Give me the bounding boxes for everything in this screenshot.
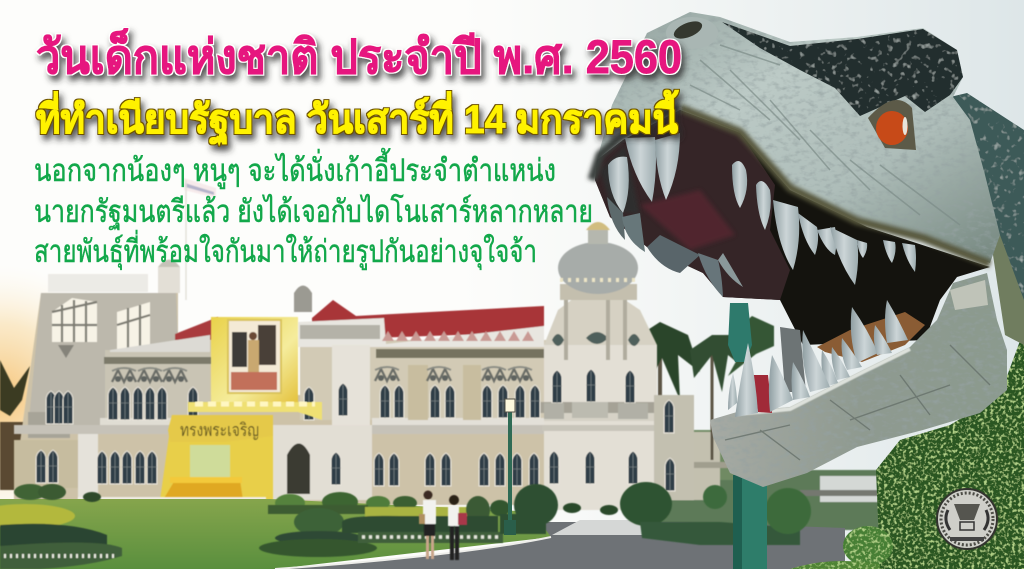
arched door (287, 444, 310, 494)
lower teeth (728, 300, 908, 417)
palms and buildings behind right side (624, 316, 885, 530)
body text: สายพันธุ์ที่พร้อมใจกันมาให้ถ่ายรูปกันอย่างจุใจจ้า (34, 230, 537, 271)
windows: upper row (46, 369, 674, 433)
trims (376, 349, 546, 358)
sign text: ทรงพระเจริญ (180, 420, 259, 440)
thai flag (184, 178, 216, 300)
right tower (540, 222, 658, 510)
body text: นายกรัฐมนตรีแล้ว ยังได้เจอกับไดโนเสาร์หลากหลาย (34, 194, 593, 230)
far right wing (654, 395, 694, 500)
government house building (14, 222, 694, 510)
left tower (14, 260, 180, 500)
tall topiary (514, 484, 558, 526)
road (275, 522, 845, 569)
people on lawn (419, 490, 467, 560)
neck (990, 210, 1024, 345)
body text (34, 148, 593, 271)
windows: lower row (36, 450, 675, 491)
eye (868, 100, 916, 150)
white base (78, 497, 266, 511)
right hedge (342, 516, 498, 533)
skin wrinkles (690, 45, 960, 225)
body text: นอกจากน้องๆ หนูๆ จะได้นั่งเก้าอี้ประจำตำแหน่ง (34, 148, 556, 189)
tongue (817, 312, 925, 362)
lower jaw (710, 273, 1007, 487)
nostril (666, 17, 718, 49)
lawn (0, 499, 845, 569)
red gum (753, 375, 772, 413)
balcony rails (544, 403, 564, 419)
hedges and topiary (0, 482, 811, 569)
gums (595, 110, 790, 300)
upper head (597, 12, 1000, 263)
subtitle line: yellow: ที่ทำเนียบรัฐบาล วันเสาร์ที่ 14 มกราคมนี้ (36, 90, 679, 146)
upper teeth (607, 133, 916, 297)
facade base (14, 293, 548, 505)
white parapets (110, 335, 210, 352)
title line: pink: วันเด็กแห่งชาติ ประจำปี พ.ศ. 2560 (36, 27, 682, 83)
red roofs (175, 317, 218, 340)
back of head (950, 93, 1024, 300)
right hedge wall (790, 330, 1024, 569)
left hedges (0, 504, 75, 528)
upper lip shadow (680, 108, 990, 264)
jaw cracks (725, 345, 990, 460)
left palm trees against sunset (0, 360, 30, 490)
golden sign (160, 415, 273, 500)
long hedge (640, 522, 800, 545)
tracery (112, 367, 532, 382)
mouth interior (595, 110, 990, 345)
dark crown (722, 22, 963, 116)
upper body between towers (105, 350, 210, 420)
government seal (937, 489, 997, 549)
small cupola (294, 286, 312, 312)
lamp post (504, 399, 516, 535)
royal portrait panel (211, 317, 298, 404)
row of bushes behind base (14, 484, 46, 500)
dinosaur support pole (728, 303, 767, 569)
dinosaur head (592, 12, 1024, 487)
center topiary (294, 508, 344, 536)
garland (188, 402, 322, 420)
